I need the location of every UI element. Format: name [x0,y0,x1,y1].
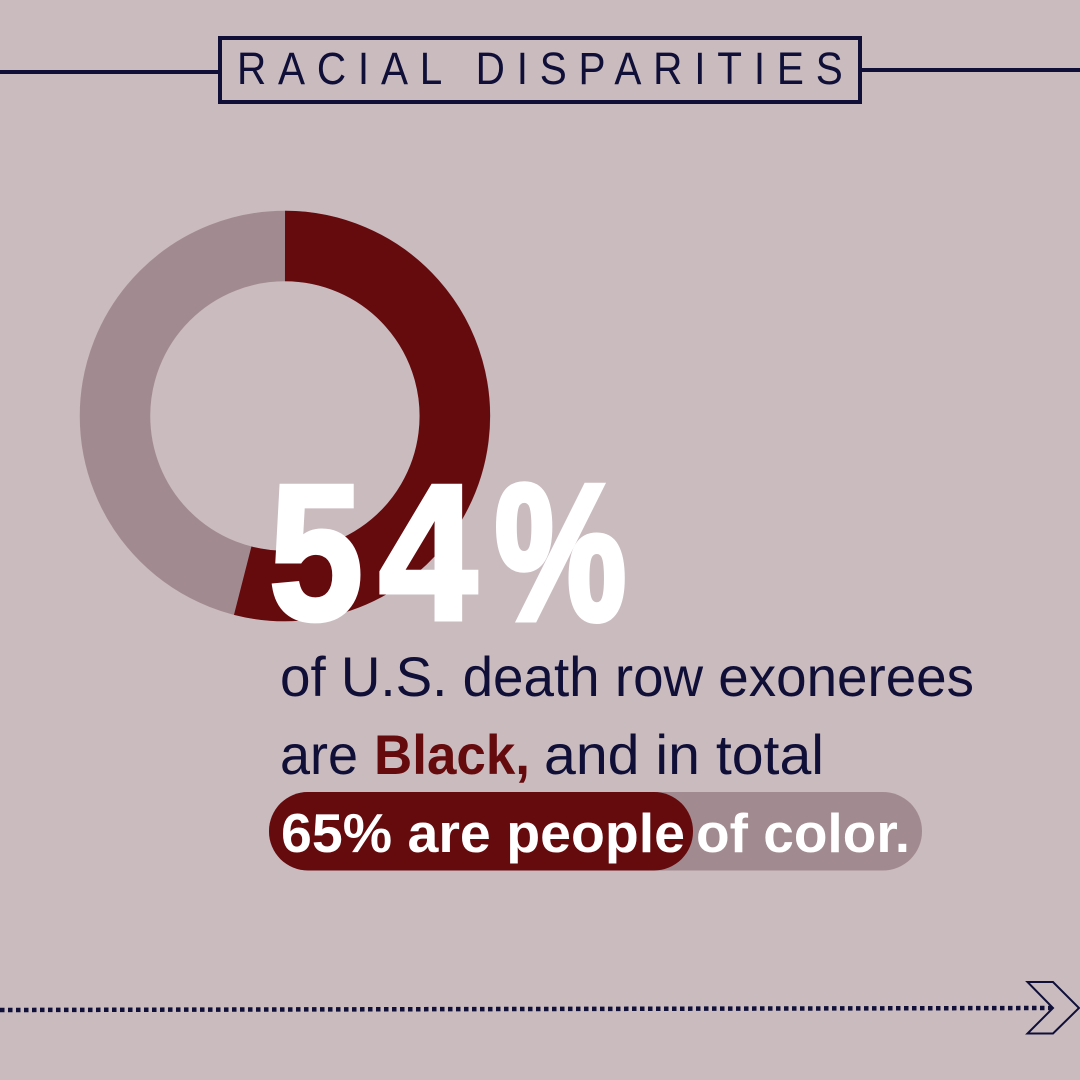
big statistic: 54%: 4 [379,444,477,660]
description text [280,645,974,786]
dotted timeline arrow [0,982,1079,1034]
description text: of U.S. death row exonerees [280,645,974,708]
big statistic: 54%: 5 [269,444,363,660]
highlight bar: 65% are people of color: of color. [696,802,910,864]
description text: are [280,723,358,786]
title: RACIAL DISPARITIES [237,44,843,95]
highlight bar: 65% are people of color: 65% are people [281,802,685,864]
description text: and in total [544,723,824,786]
header rule: right [860,68,1080,72]
description text: Black, [374,723,530,786]
big statistic: 54%: % [495,444,626,660]
big statistic: 54% [269,444,626,660]
highlight bar: 65% are people of color [269,792,922,870]
donut chart: 54% [115,246,455,586]
header rule: left [0,70,220,74]
